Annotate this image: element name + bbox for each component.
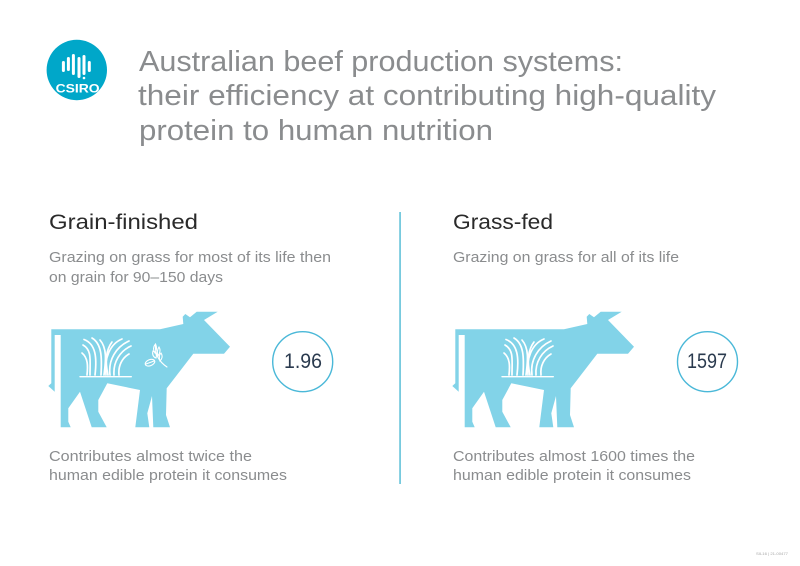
value circle: 1.96: 1.96 [284,350,322,373]
icon: cow with grass and grain [48,312,230,427]
caption: grain-finished [49,449,287,484]
icon: grass [80,338,131,377]
value circle: 1.96 [273,332,333,392]
caption: grain-finished: human edible protein it consumes [49,468,287,484]
divider [399,212,401,484]
heading: grass-fed: Grass-fed [453,210,553,234]
title [138,46,717,147]
logo: CSIRO [47,40,107,100]
heading: grain-finished: Grain-finished [49,210,198,234]
logo: CSIRO: CSIRO [56,83,100,95]
description: grain-finished [49,250,331,286]
caption: grass-fed: Contributes almost 1600 times the [453,449,695,465]
icon: grass [502,338,553,377]
panel: grain-finished [48,210,333,484]
panel: grass-fed [452,210,738,484]
caption: grain-finished: Contributes almost twice the [49,449,252,465]
icon: cow with grass [452,312,634,427]
icon: grain [144,344,167,367]
description: grain-finished: on grain for 90–150 days [49,270,223,286]
caption: grass-fed: human edible protein it consumes [453,468,691,484]
caption: grass-fed [453,449,695,484]
value circle: 1597: 1597 [687,350,727,373]
footer reference code: SIL16 | 21-00477 [756,551,789,556]
description: grass-fed: Grazing on grass for all of its life [453,250,679,266]
title: their efficiency at contributing high-quality [138,80,717,112]
title: Australian beef production systems: [139,46,623,78]
value circle: 1597 [678,332,738,392]
title: protein to human nutrition [139,115,493,147]
description: grain-finished: Grazing on grass for most of its life then [49,250,331,266]
